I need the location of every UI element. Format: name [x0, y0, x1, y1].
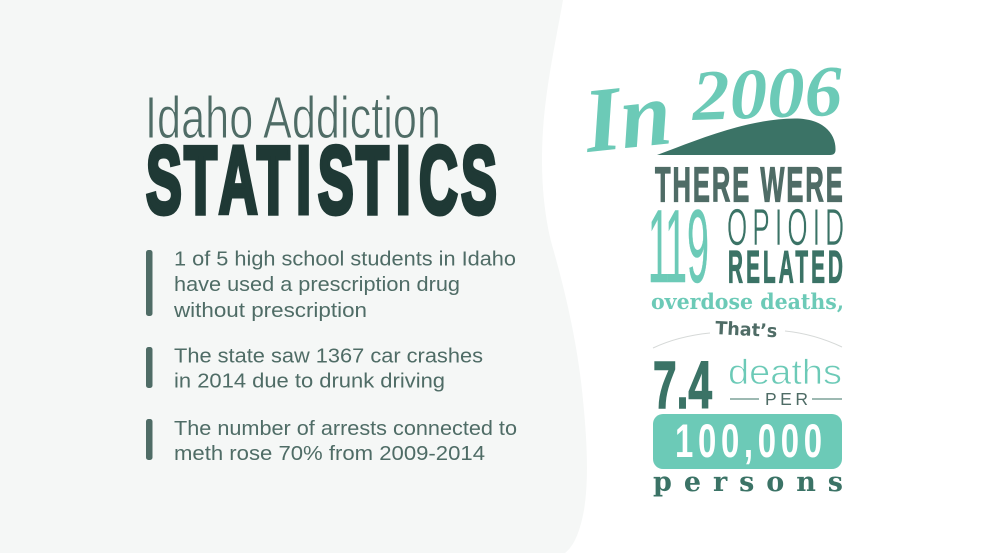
- text: overdose deaths: overdose deaths,: [651, 289, 844, 314]
- text: deaths: deaths: [728, 353, 842, 392]
- stat 1 text: without prescription: [173, 299, 367, 322]
- number: 7.4: 7.4: [653, 348, 712, 423]
- script heading: In: In: [578, 61, 676, 172]
- stat 1 text: have used a prescription drug: [174, 273, 460, 296]
- text: OPIOID: OPIOID: [727, 198, 844, 256]
- badge background: [653, 414, 842, 469]
- arc right of That's: [785, 331, 842, 347]
- stat 3 text: meth rose 70% from 2009-2014: [174, 442, 485, 465]
- panel: left statistics column: [145, 85, 517, 465]
- accent bar 2: [146, 347, 152, 388]
- badge number: 100,000: [675, 414, 822, 467]
- swoosh underline: [657, 118, 836, 155]
- panel: right typographic callout: [578, 51, 844, 498]
- text: THERE WERE: THERE WERE: [655, 159, 843, 213]
- arc left of That's: [653, 333, 710, 348]
- stat 2 text: in 2014 due to drunk driving: [174, 370, 445, 393]
- stat 3: [146, 417, 517, 465]
- rule left of PER: [730, 398, 759, 400]
- stat 1: [146, 248, 516, 322]
- number: 119: 119: [648, 188, 709, 304]
- stat 1 text: 1 of 5 high school students in Idaho: [174, 248, 516, 271]
- heading: STATISTICS: STATISTICS: [146, 128, 497, 234]
- accent bar 3: [146, 419, 152, 460]
- text: PER: PER: [765, 389, 808, 409]
- script heading: 2006: 2006: [690, 51, 843, 136]
- panel: left background shape: [0, 0, 587, 553]
- text: That's: That’s: [715, 318, 778, 342]
- text: persons: persons: [653, 467, 843, 498]
- stat 2 text: The state saw 1367 car crashes: [174, 345, 483, 368]
- heading: Idaho Addiction: Idaho Addiction: [145, 85, 441, 151]
- rule right of PER: [812, 398, 842, 400]
- badge: 100,000: [653, 414, 842, 469]
- stat 3 text: The number of arrests connected to: [174, 417, 517, 440]
- text: RELATED: RELATED: [728, 243, 843, 293]
- accent bar 1: [146, 250, 152, 316]
- stat 2: [146, 345, 483, 393]
